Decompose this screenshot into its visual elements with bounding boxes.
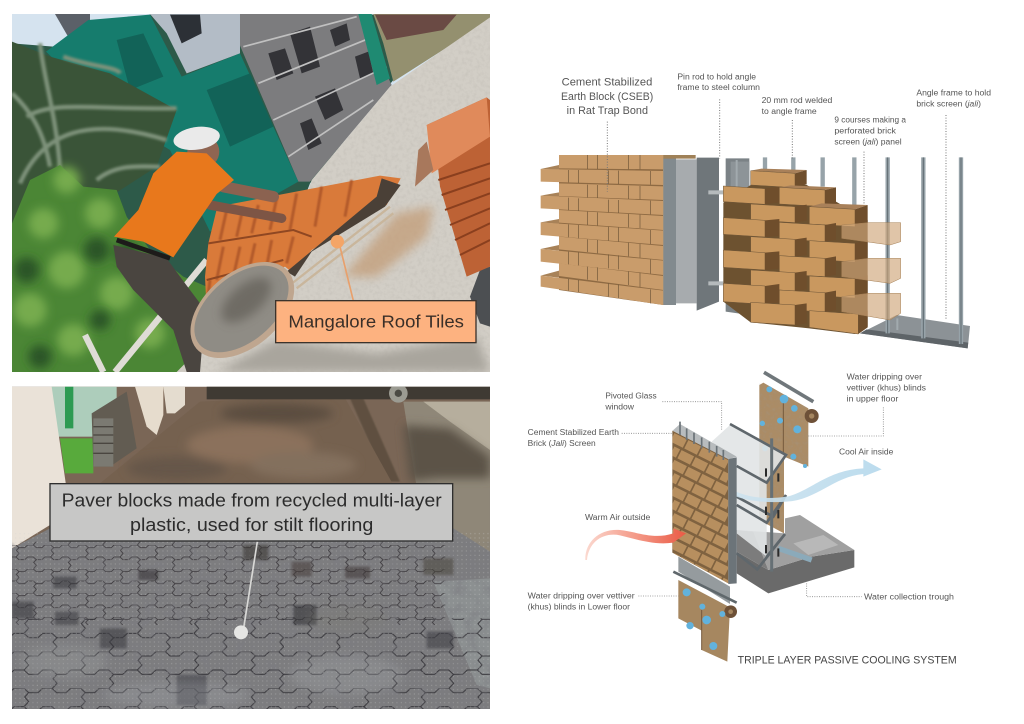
cool air arrow [730,459,882,502]
stacked paver blocks [92,392,137,467]
worker [113,124,282,372]
label: pivoted glass window [604,392,657,412]
label: angle frame: Angle frame to hold [916,89,991,98]
cream pillars [135,387,185,435]
label: pin rod [677,72,760,92]
diagram: rat trap bond wall and jali screen section [541,72,991,348]
label: 9 courses: 9 courses making a [834,116,907,125]
green netting and grass [50,387,117,473]
white column [12,387,66,548]
mortar stain [343,207,433,277]
tile stack [415,97,490,277]
perforated brick jali bricks [723,169,868,334]
label: 9 courses: perforated brick [834,127,896,136]
diagram: triple layer passive cooling system [528,372,957,666]
label: warm air outside: Warm Air outside [585,513,651,522]
label: 20 mm rod [762,96,832,116]
steel column [663,155,723,311]
paver floor [12,528,490,709]
grey building [227,14,392,182]
photo: recycled plastic paver blocks on stilt floor [12,384,490,709]
ghosted translucent bricks [842,223,901,320]
steel angle below screen [673,557,737,604]
pointer line and dot [331,235,353,301]
label: pin rod: frame to steel column [677,83,760,92]
label: lower floor blinds: (khus) blinds in Lower floor [528,602,630,611]
label: 9 courses [834,116,907,147]
brown dirty paving [370,443,391,482]
far right floor [403,402,490,552]
label: Cement Stabilized Earth Block: in Rat Trap Bond [567,105,648,117]
green tree foliage [12,165,207,372]
teal construction net [46,15,298,232]
mortar basin [190,262,294,358]
laid clay tiles [205,176,401,294]
label: upper floor blinds [847,372,926,403]
lower vetiver blind [678,580,737,662]
label: cool air inside: Cool Air inside [839,448,894,457]
backing behind worker [17,14,393,286]
label: jali screen: Brick (Jali) Screen [528,439,596,448]
pivoted glass window [712,424,786,572]
label: pivoted glass window: Pivoted Glass [605,392,657,401]
CSEB rat trap bond wall [541,155,663,305]
callout: Mangalore Roof Tiles: Mangalore Roof Tiles [288,312,464,332]
callout: paver blocks caption: Paver blocks made from recycled multi-layer [62,490,442,511]
heading: triple layer passive cooling system: TRIPLE LAYER PASSIVE COOLING SYSTEM [738,654,957,666]
dotted leader lines [607,99,946,320]
far building [373,14,490,82]
pointer line and dot [234,542,257,639]
callout: paver blocks caption [50,484,453,541]
label: jali screen [528,428,619,448]
vertical rods [765,157,961,344]
label: 20 mm rod: 20 mm rod welded [762,96,832,105]
callout: Mangalore Roof Tiles [276,301,476,343]
label: jali screen: Cement Stabilized Earth [528,428,619,437]
label: angle frame [916,89,991,109]
dotted leader lines [622,402,883,597]
label: upper floor blinds: vettiver (khus) blinds [847,383,926,392]
brick shadow backing [723,185,868,334]
label: Cement Stabilized Earth Block: Cement Stabilized [562,77,652,89]
label: water collection trough: Water collection trough [864,592,954,601]
label: lower floor blinds: Water dripping over vettiver [528,591,635,600]
water trough base [737,515,854,593]
jali brick screen [672,422,737,585]
upper vetiver blind [759,372,819,533]
label: Cement Stabilized Earth Block [561,77,653,117]
concrete roof slope [177,17,490,372]
label: pivoted glass window: window [604,403,634,412]
label: 9 courses: screen (jali) panel [834,138,902,147]
palm tree [12,42,177,230]
label: pin rod: Pin rod to hold angle [677,72,757,81]
warm air arrow [585,528,686,560]
angle frame base and rear column [726,158,970,348]
white bamboo pole [85,260,207,372]
label: lower floor blinds [528,591,635,611]
label: upper floor blinds: Water dripping over [847,372,922,381]
label: angle frame: brick screen (jali) [916,100,981,109]
dark top band and vehicle wheel [206,386,490,403]
pale building with balconies [150,14,240,73]
callout: paver blocks caption: plastic, used for stilt flooring [130,514,373,535]
photo: Mangalore roof tiles being laid [12,14,490,377]
label: upper floor blinds: in upper floor [847,394,899,403]
label: Cement Stabilized Earth Block: Earth Block (CSEB) [561,91,653,103]
label: 20 mm rod: to angle frame [762,107,817,116]
